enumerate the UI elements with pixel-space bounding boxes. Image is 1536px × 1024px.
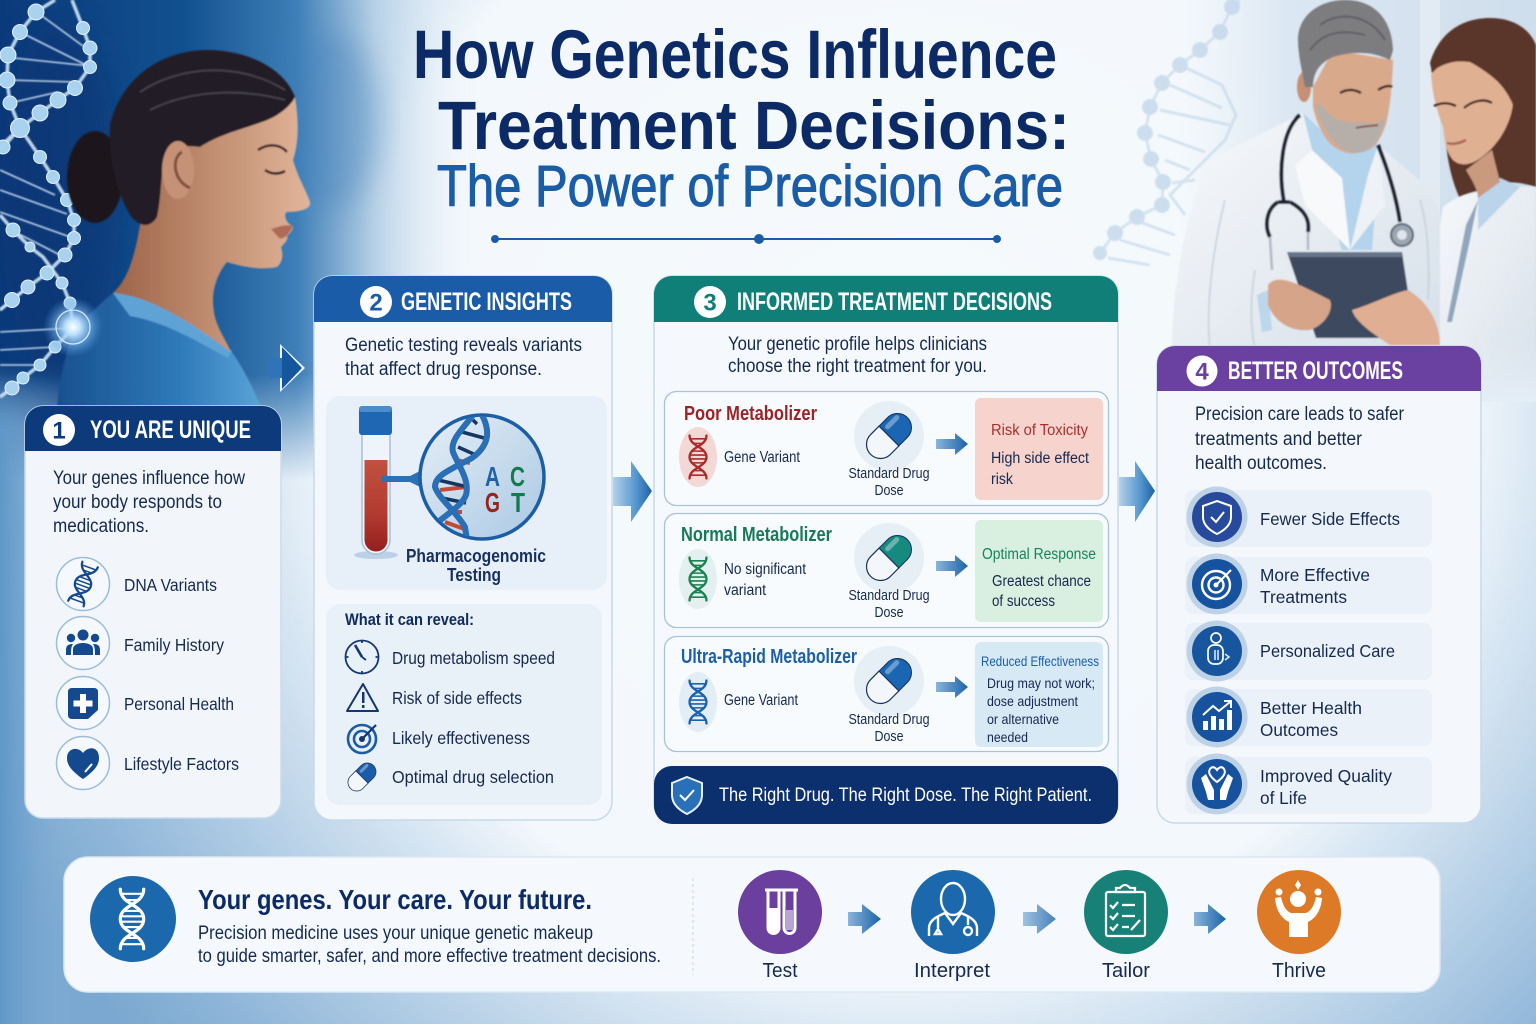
panel 2: genetic insights [314,276,612,820]
icon: teal pill [854,523,924,593]
item: effectiveness: Likely effectiveness [392,728,530,748]
icon: magnifier with DNA: G [485,487,500,518]
row: personalized care: Personalized Care [1260,641,1395,661]
arrow [1194,904,1226,934]
label: pharmacogenomic testing: Testing [447,565,501,585]
header 3 [654,276,1118,322]
row: personalized care [1185,620,1432,682]
label: no significant variant: variant [724,582,767,599]
header 2: 2 [369,290,383,316]
arrow [936,676,968,698]
step: test [738,870,822,982]
illustration: DNA beads [0,4,97,395]
body text 1: Your genes influence how [53,468,245,489]
item: drug selection [344,759,554,795]
card: poor metabolizer: Poor Metabolizer [684,403,817,425]
card: ultra-rapid metabolizer [664,636,1108,752]
label: improved quality of life [1260,766,1392,808]
label: standard dose: Standard Drug [848,466,930,482]
body text 2: Genetic testing reveals variants [345,335,582,356]
item: lifestyle factors [56,736,239,790]
row: better health outcomes [1185,686,1432,748]
illustration: doctors with tablet [1172,0,1536,400]
footer text [198,923,661,967]
footer text: to guide smarter, safer, and more effective treatment decisions. [198,946,661,967]
header 4: BETTER OUTCOMES [1228,357,1403,385]
label: better health outcomes: Outcomes [1260,720,1338,740]
panel: what it can reveal: What it can reveal: [345,610,474,629]
label: pharmacogenomic testing [406,546,546,585]
illustration: patient profile [57,50,310,410]
title: Treatment Decisions: [438,87,1070,164]
result: reduced effectiveness: Drug may not work; [987,675,1095,691]
label: standard dose [848,466,930,499]
label: more effective treatments: More Effective [1260,565,1370,585]
result: optimal response: of success [992,593,1055,610]
step: interpret: Interpret [914,960,990,982]
label: no significant variant [724,561,807,599]
result: reduced effectiveness: Reduced Effectiveness [981,653,1099,669]
label: improved quality of life: Improved Quality [1260,766,1392,786]
label: standard dose: Standard Drug [848,712,930,728]
card: poor metabolizer: Gene Variant [724,449,801,466]
row: improved quality of life [1185,754,1432,814]
result: risk of toxicity [975,398,1103,500]
icon: magnifier with DNA [420,415,544,540]
footer panel [64,857,1440,992]
label: standard dose: Dose [874,483,904,499]
card: normal metabolizer: Normal Metabolizer [681,524,832,546]
card: ultra-rapid metabolizer: Gene Variant [724,692,799,709]
arrow: step 1 to 2 [270,344,305,392]
icon: red DNA [679,427,717,487]
title: How Genetics Influence [413,16,1057,93]
footer heading: Your genes. Your care. Your future. [198,884,592,915]
arrow [936,555,968,577]
result: reduced effectiveness: or alternative [987,711,1059,727]
item: side effects [347,684,522,711]
label: standard dose: Dose [874,605,904,621]
title [413,16,1070,219]
card: normal metabolizer [664,514,1108,628]
body text 3 [728,334,987,377]
header 2 [314,276,612,322]
icon: shield [672,777,702,814]
icon: magnifier with DNA: A [485,461,500,492]
label: more effective treatments: Treatments [1260,587,1347,607]
header 3: 3 [703,290,717,316]
body text 3: Your genetic profile helps clinicians [728,334,987,355]
label: improved quality of life: of Life [1260,788,1307,808]
row: more effective treatments [1185,554,1432,614]
header 1 [25,406,281,451]
body text 1 [53,468,245,537]
body text 1: your body responds to [53,492,222,513]
icon: blue DNA [679,672,717,732]
item: family history: Family History [124,635,224,655]
result: reduced effectiveness: dose adjustment [987,693,1078,709]
body text 4: health outcomes. [1195,453,1327,474]
label: more effective treatments [1260,565,1370,607]
item: side effects: Risk of side effects [392,688,522,708]
item: DNA variants: DNA Variants [124,575,217,595]
header 4 [1157,346,1481,391]
icon: blue pill [854,646,924,716]
arrow: step 2 to 3 [613,461,652,522]
panel 1: you are unique [25,406,281,818]
header 3: INFORMED TREATMENT DECISIONS [737,288,1052,316]
banner: right drug right dose right patient [654,766,1118,824]
result: risk of toxicity: Risk of Toxicity [991,422,1088,439]
coat fade [1481,340,1536,402]
item: drug selection: Optimal drug selection [392,767,554,787]
icon: test tube [354,406,398,559]
illustration: faint DNA helix right [1093,0,1240,265]
label: better health outcomes [1260,698,1362,740]
icon: blue pill [854,401,924,471]
icon: magnifier with DNA: C [510,461,525,492]
card: poor metabolizer [664,392,1108,506]
result: optimal response: Optimal Response [982,546,1096,563]
panel: what it can reveal [326,604,602,805]
illustration: glowing DNA helix [0,0,90,397]
body text 4 [1195,404,1405,474]
item: family history [56,616,224,670]
arrow [1023,904,1056,934]
result: reduced effectiveness: needed [987,729,1028,745]
body text 2: that affect drug response. [345,359,542,380]
label: standard dose: Standard Drug [848,588,930,604]
label: standard dose [848,588,930,621]
arrow [936,433,968,455]
footer text: Precision medicine uses your unique genetic makeup [198,923,593,944]
step: tailor [1084,870,1168,982]
header 4: 4 [1195,358,1209,386]
result: optimal response [975,520,1103,622]
header 1: 1 [52,418,66,444]
body text 2 [345,335,582,380]
label: standard dose: Dose [874,729,904,745]
result: optimal response: Greatest chance [992,573,1091,590]
panel: pharmacogenomic testing [326,396,607,590]
icon: footer DNA [90,876,176,962]
item: metabolism speed [346,640,555,674]
label: pharmacogenomic testing: Pharmacogenomic [406,546,546,566]
label: standard dose [848,712,930,745]
banner: right drug right dose right patient: The Right Drug. The Right Dose. The Right Patient. [719,784,1092,806]
icon: magnifier with DNA: T [511,487,525,518]
result: reduced effectiveness [975,642,1103,747]
step: thrive: Thrive [1272,960,1326,982]
step: interpret [911,870,995,982]
card: ultra-rapid metabolizer: Ultra-Rapid Metabolizer [681,646,857,668]
label: no significant variant: No significant [724,561,807,578]
header 1: YOU ARE UNIQUE [90,416,251,444]
arrow [848,904,881,934]
body text 4: Precision care leads to safer [1195,404,1405,425]
panel 4: better outcomes [1157,346,1481,823]
illustration: glowing node [43,297,103,357]
item: personal health: Personal Health [124,694,234,714]
result: risk of toxicity: risk [991,471,1013,488]
item: metabolism speed: Drug metabolism speed [392,648,555,668]
item: lifestyle factors: Lifestyle Factors [124,754,239,774]
header 2: GENETIC INSIGHTS [401,288,572,316]
body text 1: medications. [53,516,149,537]
result: risk of toxicity: High side effect [991,450,1090,467]
row: fewer side effects: Fewer Side Effects [1260,509,1400,529]
title: The Power of Precision Care [437,154,1063,219]
body text 3: choose the right treatment for you. [728,356,987,377]
step: thrive [1257,870,1341,982]
label: better health outcomes: Better Health [1260,698,1362,718]
body text 4: treatments and better [1195,429,1363,450]
row: fewer side effects [1185,486,1432,548]
arrow: step 3 to 4 [1119,461,1155,522]
item: personal health [56,676,234,730]
item: effectiveness [348,725,530,753]
step: test: Test [762,960,798,982]
step: tailor: Tailor [1102,960,1150,982]
panel 3: informed treatment decisions [654,276,1118,824]
icon: green DNA [679,549,717,609]
title divider [491,234,1001,244]
item: DNA variants [56,558,217,610]
icon: connector [382,470,422,488]
